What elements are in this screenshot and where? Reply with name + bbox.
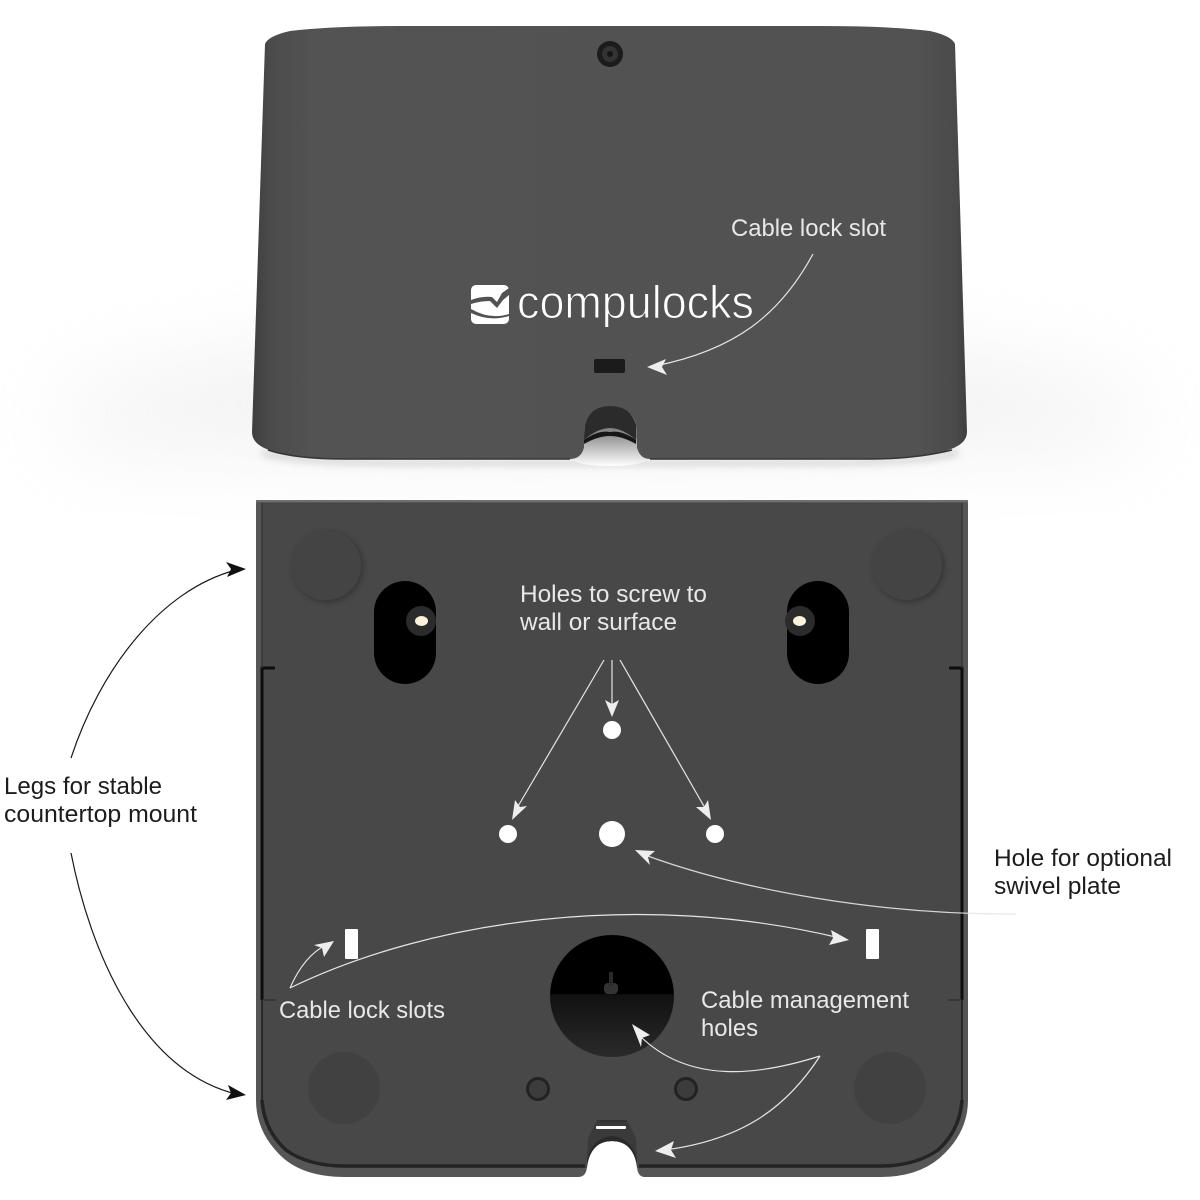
arrows: cable lock slots bbox=[290, 915, 849, 988]
bottom edge shade bbox=[268, 450, 952, 459]
label: legs: Legs for stable bbox=[4, 773, 162, 800]
logo icon bbox=[471, 285, 509, 324]
arrows: cable management holes bbox=[632, 1024, 820, 1158]
small screws bbox=[526, 1077, 698, 1101]
panel: stand front view bbox=[252, 26, 967, 466]
label: holes to screw: Holes to screw to bbox=[520, 581, 707, 608]
leg: bottom right bbox=[854, 1052, 926, 1124]
bottom edge rim bbox=[262, 1100, 962, 1166]
label: swivel plate: swivel plate bbox=[994, 873, 1121, 900]
cable management hole bbox=[550, 935, 674, 1057]
screw holes bbox=[499, 721, 724, 847]
logo wordmark: compulocks bbox=[517, 276, 754, 328]
leg: top left bbox=[291, 530, 364, 603]
arrow: cable lock slot bbox=[647, 254, 813, 375]
leg: bottom left bbox=[308, 1052, 380, 1124]
leg: top right bbox=[872, 530, 945, 603]
cable lock slot holes bbox=[345, 929, 879, 959]
inner plate bbox=[262, 503, 962, 1168]
device shadow bbox=[60, 330, 1140, 465]
keyhole: right bbox=[785, 581, 849, 684]
label: cable management holes: Cable management bbox=[701, 987, 909, 1014]
label: legs bbox=[4, 773, 197, 828]
label: cable management holes bbox=[701, 987, 909, 1042]
arrow: swivel plate bbox=[635, 850, 1016, 914]
keyhole: left bbox=[374, 581, 436, 684]
label: swivel plate: Hole for optional bbox=[994, 845, 1172, 872]
label: holes to screw: wall or surface bbox=[519, 609, 677, 636]
label: swivel plate bbox=[994, 845, 1172, 900]
arrows: holes to screw bbox=[512, 660, 711, 820]
camera screw bbox=[597, 41, 623, 67]
stand body bbox=[252, 26, 967, 459]
side rails bbox=[262, 503, 962, 1100]
label: cable management holes: holes bbox=[701, 1015, 758, 1042]
label: cable lock slot: Cable lock slot bbox=[731, 215, 886, 242]
bottom notch bbox=[587, 1121, 637, 1165]
label: cable lock slots: Cable lock slots bbox=[279, 997, 445, 1024]
base plate bbox=[256, 500, 968, 1177]
label: legs: countertop mount bbox=[4, 801, 197, 828]
cable notch bbox=[570, 406, 650, 466]
logo: compulocks bbox=[471, 276, 754, 328]
label: holes to screw bbox=[519, 581, 707, 636]
arrow: legs to top bbox=[71, 562, 246, 758]
cable lock slot bbox=[594, 359, 625, 373]
arrow: legs to bottom bbox=[71, 853, 246, 1100]
panel: base underside bbox=[256, 500, 1016, 1177]
